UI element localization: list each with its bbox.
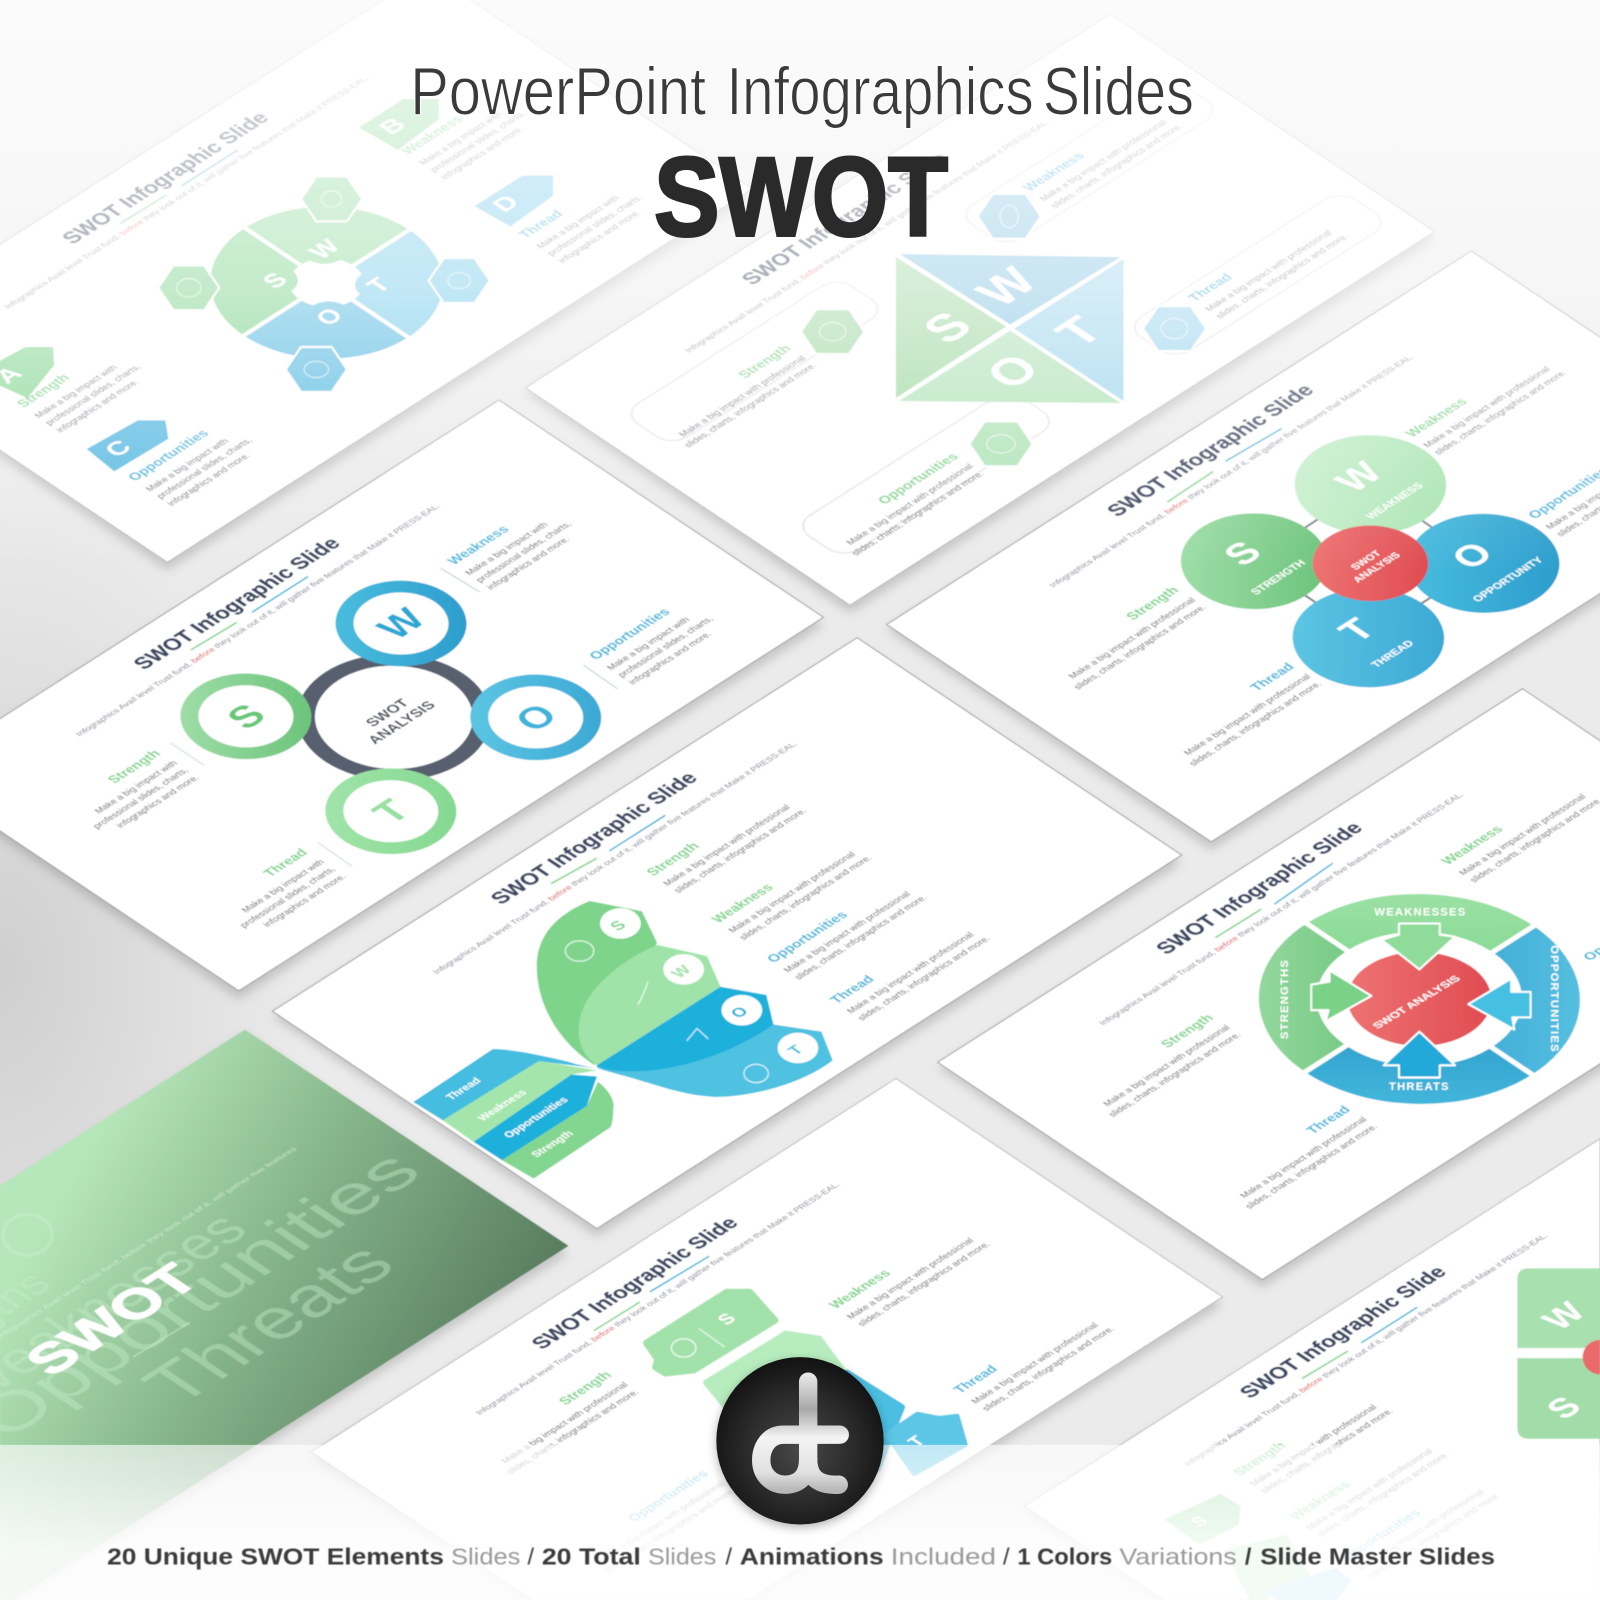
text blocks: slides, charts, infographics and more. xyxy=(855,934,992,1022)
circle diagram: S xyxy=(257,268,294,293)
text blocks: Weakness xyxy=(1020,150,1088,194)
footer feature line: / xyxy=(528,1543,535,1569)
text blocks: Make a big impact with xyxy=(605,616,692,672)
text blocks: Weakness xyxy=(398,113,466,157)
footer feature line: / xyxy=(1003,1543,1010,1569)
text blocks: slides, charts, infographics and more. xyxy=(849,470,986,557)
footer feature line: Slides xyxy=(648,1543,716,1569)
text blocks: Opportunities xyxy=(874,450,962,507)
ribbon diagram: W xyxy=(668,962,696,981)
band W xyxy=(579,945,720,1065)
node W xyxy=(308,563,494,684)
footer feature line: Variations xyxy=(1119,1543,1237,1569)
text blocks: Strength xyxy=(735,342,794,381)
centre label: SWOT ANALYSIS xyxy=(1370,974,1464,1031)
text blocks: infographics and more. xyxy=(165,452,252,508)
text blocks: Make a big impact with professional xyxy=(1457,793,1588,877)
ribbon diagram: S xyxy=(606,918,630,934)
cover sheet xyxy=(0,1030,568,1600)
text blocks: Make a big impact with professional xyxy=(1238,1115,1369,1200)
text blocks: professional slides, charts, xyxy=(238,865,337,929)
footer feature line: Slides xyxy=(451,1543,520,1569)
text blocks: Make a big impact with professional xyxy=(844,462,975,546)
text blocks: infographics and more. xyxy=(438,125,526,181)
centre red circle xyxy=(1289,510,1452,617)
circle diagram: T xyxy=(361,274,397,297)
bubble S: S xyxy=(712,1310,740,1328)
text blocks: slides, charts, infographics and more. xyxy=(737,854,874,941)
heading: SWOT Infographic Slide xyxy=(486,769,703,908)
quadrant panels: S xyxy=(1539,1391,1590,1425)
quadrant panels xyxy=(1517,1268,1600,1439)
band O xyxy=(597,987,773,1071)
main heading line xyxy=(410,54,1194,129)
circle T: THREAD xyxy=(1369,639,1417,670)
heading: Infographics Avail level Trust fund, before they look out of it, will gather five features that Make it PRESS-EAL. xyxy=(683,119,1052,354)
slide sheet xyxy=(887,251,1600,842)
text blocks: Strength xyxy=(1123,584,1182,622)
heading: Infographics Avail level Trust fund, before they look out of it, will gather five features that Make it PRESS-EAL. xyxy=(1097,791,1466,1027)
text pills xyxy=(622,77,1390,559)
text blocks: professional slides, charts, xyxy=(43,363,143,427)
lower band: Opportunities xyxy=(473,1074,597,1160)
heading: Infographics Avail level Trust fund, before they look out of it, will gather five features that Make it PRESS-EAL. xyxy=(1182,1232,1551,1467)
text blocks: Weakness xyxy=(444,523,512,567)
text blocks: slides, charts, infographics and more. xyxy=(1106,1031,1243,1119)
text blocks: slides, charts, infographics and more. xyxy=(1214,232,1350,320)
ribbon diagram: T xyxy=(784,1043,808,1058)
hexagon icons xyxy=(801,194,1206,466)
left background shading xyxy=(0,480,306,1459)
text blocks: slides, charts, infographics and more. xyxy=(980,1325,1117,1413)
quadrant labels: OPPORTUNITIES xyxy=(1548,945,1560,1053)
ribbon diagram: Opportunities xyxy=(501,1095,571,1140)
slide 5: ribbon xyxy=(272,638,1182,1229)
text blocks: Weakness xyxy=(1438,823,1506,867)
text blocks: slides, charts, infographics and more. xyxy=(504,1388,641,1476)
text blocks: Make a big impact with professional xyxy=(596,1480,727,1564)
ribbon diagram: O xyxy=(727,1004,753,1021)
text blocks: Thread xyxy=(827,973,877,1006)
lower band: Thread xyxy=(413,1049,597,1120)
circle S xyxy=(1151,494,1358,629)
text blocks: Thread xyxy=(1185,271,1235,304)
slide sheet xyxy=(311,1079,1222,1600)
slide 1: gear circle xyxy=(0,0,752,562)
circle O xyxy=(1377,493,1591,633)
ribbon diagram xyxy=(413,901,833,1179)
node S: S xyxy=(218,698,276,736)
ribbon diagram: Strength xyxy=(529,1129,576,1160)
text blocks: infographics and more. xyxy=(261,872,348,929)
bubble W xyxy=(706,1334,857,1434)
text blocks: Make a big impact with professional xyxy=(1248,1403,1379,1487)
text blocks: professional slides, charts, xyxy=(428,110,528,174)
centre red circle: ANALYSIS xyxy=(1351,551,1404,585)
circle T: T xyxy=(1330,613,1385,648)
text blocks: Weakness xyxy=(1402,396,1470,439)
text blocks: Make a big impact with professional xyxy=(1101,1024,1232,1108)
text blocks: Make a big impact with professional xyxy=(677,354,808,438)
text blocks: Opportunities xyxy=(586,606,673,662)
text blocks: Strength xyxy=(643,840,702,878)
heading: SWOT Infographic Slide xyxy=(527,1214,744,1353)
text blocks: Make a big impact with professional xyxy=(661,803,792,887)
cover chalk words: Threats xyxy=(125,1231,410,1415)
text blocks: Make a big impact with xyxy=(534,194,622,250)
text blocks: professional slides, charts, xyxy=(154,436,254,500)
band labels: Thread xyxy=(444,1076,484,1102)
text blocks: Thread xyxy=(1247,661,1297,693)
text blocks: Make a big impact with xyxy=(417,110,504,166)
text blocks: Make a big impact with professional xyxy=(845,931,976,1015)
quadrant labels: STRENGTHS xyxy=(1279,959,1291,1039)
text blocks: slides, charts, infographics and more. xyxy=(682,361,819,449)
text blocks xyxy=(1230,1388,1503,1579)
green cover slide xyxy=(0,1030,568,1600)
node S xyxy=(153,656,339,777)
node O: O xyxy=(506,698,567,738)
text blocks: Make a big impact with professional xyxy=(969,1321,1100,1405)
top white fade xyxy=(0,0,1600,571)
slide 8: bottom right xyxy=(1024,1139,1600,1600)
arrows to centre xyxy=(1311,923,1531,1078)
circle W xyxy=(1263,415,1478,555)
quadrant ring xyxy=(1192,851,1600,1147)
text blocks: Make a big impact with professional xyxy=(499,1381,630,1465)
footer feature line: / xyxy=(726,1543,733,1569)
text blocks: Make a big impact with professional xyxy=(1037,118,1169,203)
letter tags xyxy=(0,99,553,471)
circle O: OPPORTUNITY xyxy=(1470,555,1547,604)
cover sub text: Infographics Avail level Trust fund, before they look out of it, will gather five features xyxy=(0,1146,299,1340)
text blocks: professional slides, charts, xyxy=(474,520,573,584)
ring centre: ANALYSIS xyxy=(365,699,440,747)
band T xyxy=(597,1024,833,1097)
node T: T xyxy=(364,793,420,830)
centre red circle: SWOT xyxy=(1349,549,1385,572)
heading: Infographics Avail level Trust fund, before they look out of it, will gather five features that Make it PRESS-EAL. xyxy=(431,740,800,976)
circle S: STRENGTH xyxy=(1249,558,1309,597)
text blocks: slides, charts, infographics and more. xyxy=(1258,1407,1395,1495)
circle W: WEAKNESS xyxy=(1364,481,1426,521)
text blocks: Make a big impact with professional xyxy=(844,1236,976,1321)
main heading line: PowerPoint xyxy=(410,54,706,129)
text blocks: Make a big impact with professional xyxy=(1304,1447,1435,1531)
ring centre xyxy=(269,636,518,799)
text blocks xyxy=(475,1220,1117,1575)
text blocks: Strength xyxy=(1230,1440,1289,1478)
text blocks: Make a big impact with professional xyxy=(1181,673,1313,757)
text blocks: slides, charts, infographics and more. xyxy=(1187,680,1324,768)
letter tags: B xyxy=(374,114,412,139)
text blocks: Weakness xyxy=(708,881,776,925)
text blocks: Opportunities xyxy=(624,1468,712,1524)
main heading line: Infographics xyxy=(727,54,1034,129)
text blocks: Thread xyxy=(1303,1104,1354,1136)
text blocks: Thread xyxy=(516,208,566,240)
circle S: S xyxy=(1215,535,1271,572)
text blocks: Weakness xyxy=(1286,1478,1354,1522)
heading: SWOT Infographic Slide xyxy=(1235,1263,1452,1402)
slide sheet xyxy=(0,0,752,562)
slide 4: overlapping circles xyxy=(887,251,1600,842)
text blocks: Strength xyxy=(1157,1012,1217,1050)
heading: SWOT Infographic Slide xyxy=(129,534,346,673)
slide 2: envelope xyxy=(526,14,1435,605)
text blocks: slides, charts, infographics and more. xyxy=(1243,1123,1380,1210)
footer feature line: Included xyxy=(891,1543,996,1569)
text blocks xyxy=(643,788,992,1022)
envelope diagram: O xyxy=(975,346,1052,397)
text blocks: Make a big impact with professional xyxy=(726,850,858,934)
slide sheet xyxy=(1024,1139,1600,1600)
bubble S xyxy=(646,1292,776,1373)
main title SWOT: SWOT xyxy=(654,134,948,260)
text blocks: Make a big impact with professional xyxy=(1355,1488,1486,1572)
heading: Infographics Avail level Trust fund, before they look out of it, will gather five features that Make it PRESS-EAL. xyxy=(74,502,442,738)
envelope diagram xyxy=(896,254,1123,403)
logo badge xyxy=(716,1357,884,1528)
envelope diagram: T xyxy=(1045,309,1115,355)
heading: SWOT Infographic Slide xyxy=(737,149,954,288)
heading: Infographics Avail level Trust fund, before they look out of it, will gather five features that Make it PRESS-EAL. xyxy=(474,1181,842,1416)
quadrant labels: WEAKNESSES xyxy=(1374,906,1466,918)
text blocks: slides, charts, infographics and more. xyxy=(1071,603,1208,691)
heading: Infographics Avail level Trust fund, before they look out of it, will gather five features that Make it PRESS-EAL. xyxy=(1047,353,1416,589)
letter tags: S xyxy=(1186,1513,1213,1530)
text blocks xyxy=(13,90,656,508)
band S xyxy=(537,901,657,1065)
node O xyxy=(443,657,628,778)
text blocks: Opportunities xyxy=(763,909,851,965)
circle diagram: W xyxy=(303,235,347,263)
text blocks: slides, charts, infographics and more. xyxy=(1048,122,1185,210)
bottom white fade xyxy=(0,1445,1600,1600)
text blocks: slides, charts, infographics and more. xyxy=(601,1487,738,1575)
text blocks xyxy=(653,103,1350,557)
quadrant panels: W xyxy=(1535,1297,1594,1336)
text blocks: slides, charts, infographics and more. xyxy=(792,894,929,981)
text blocks: Strength xyxy=(555,1369,615,1407)
main heading line: Slides xyxy=(1043,54,1194,129)
slide sheet xyxy=(0,400,823,991)
text blocks: Make a big impact with professional xyxy=(781,890,913,974)
text blocks: Opportunities xyxy=(125,427,212,483)
text blocks: infographics and more. xyxy=(54,378,141,434)
text blocks: slides, charts, infographics and more. xyxy=(1432,369,1569,456)
lower band: Weakness xyxy=(443,1061,597,1142)
text blocks: infographics and more. xyxy=(556,209,643,265)
text blocks: infographics and more. xyxy=(114,774,201,830)
text blocks xyxy=(1077,776,1600,1210)
ribbon diagram: Weakness xyxy=(475,1088,530,1123)
bubble T: T xyxy=(903,1432,930,1450)
heading: SWOT Infographic Slide xyxy=(57,109,274,248)
heading: SWOT Infographic Slide xyxy=(1151,819,1368,958)
circle diagram xyxy=(162,175,491,390)
text blocks: Weakness xyxy=(826,1267,894,1311)
letter tags xyxy=(1164,1494,1351,1600)
ribbon icons xyxy=(565,941,768,1083)
bubble O xyxy=(816,1372,902,1469)
heading: Infographics Avail level Trust fund, before they look out of it, will gather five features that Make it PRESS-EAL. xyxy=(2,75,371,310)
text blocks: Opportunities xyxy=(1337,1507,1424,1563)
text blocks: slides, charts, infographics and more. xyxy=(672,807,809,895)
quadrant labels xyxy=(1279,906,1560,1093)
slide 7: speech bubbles xyxy=(311,1079,1222,1600)
footer feature line: 1 Colors xyxy=(1017,1543,1112,1569)
circle W: W xyxy=(1327,456,1392,499)
bubble T xyxy=(887,1414,965,1473)
hexagon icons xyxy=(158,177,490,392)
slide sheet xyxy=(938,689,1600,1280)
node W: W xyxy=(369,602,435,646)
footer feature line: 20 Unique SWOT Elements xyxy=(107,1543,444,1569)
circle diagram: O xyxy=(310,304,349,330)
letter tags: D xyxy=(487,191,525,216)
envelope diagram: W xyxy=(965,259,1050,314)
text blocks: Make a big impact with professional xyxy=(1066,596,1198,680)
lower band: Strength xyxy=(502,1082,614,1179)
slide 6: circle with arrows xyxy=(938,689,1600,1280)
cover title: SWOT xyxy=(12,1255,211,1384)
text blocks: Make a big impact with professional xyxy=(1421,365,1552,449)
text blocks: Thread xyxy=(950,1363,1001,1396)
text blocks xyxy=(1042,349,1600,768)
text blocks: professional slides, charts, xyxy=(545,193,645,257)
ring centre: SWOT xyxy=(363,697,413,730)
text blocks: slides, charts, infographics and more. xyxy=(1315,1451,1451,1538)
footer feature line xyxy=(107,1543,1495,1569)
text blocks: professional slides, charts, xyxy=(91,766,190,830)
text blocks: Make a big impact with professional xyxy=(1203,229,1334,313)
tag circles xyxy=(600,908,818,1063)
footer feature line: / xyxy=(1245,1543,1252,1569)
circle T xyxy=(1261,568,1476,708)
text blocks: Make a big impact with xyxy=(92,759,180,815)
footer feature line: Animations xyxy=(740,1543,884,1569)
text blocks: Make a big impact with xyxy=(143,437,231,493)
footer feature line: Slide Master Slides xyxy=(1260,1543,1495,1569)
envelope diagram: S xyxy=(912,304,984,352)
text blocks: Make a big impact with xyxy=(239,858,327,914)
text blocks: Make a big impact with xyxy=(463,521,550,577)
text blocks: slides, charts, infographics and more. xyxy=(855,1240,992,1328)
slide sheet xyxy=(526,14,1435,605)
text blocks: infographics and more. xyxy=(626,630,714,686)
text blocks: slides, charts, infographics and more. xyxy=(1366,1492,1503,1579)
text blocks: Make a big impact with xyxy=(32,364,119,420)
slide 3: ring with four nodes xyxy=(0,400,823,991)
text blocks: Strength xyxy=(104,747,164,786)
node T xyxy=(298,751,483,872)
text blocks: professional slides, charts, xyxy=(615,615,715,679)
text blocks xyxy=(61,500,726,937)
text blocks: Strength xyxy=(13,372,73,410)
quadrant labels: THREATS xyxy=(1389,1081,1450,1093)
circle O: O xyxy=(1443,536,1503,576)
slide sheet xyxy=(272,638,1182,1229)
letter tags: C xyxy=(99,436,137,461)
text blocks: infographics and more. xyxy=(484,535,572,591)
heading: SWOT Infographic Slide xyxy=(1102,381,1319,520)
connecting square xyxy=(1254,485,1484,638)
footer feature line: 20 Total xyxy=(542,1543,641,1569)
icon: ct monogram xyxy=(761,1382,840,1485)
text blocks: Thread xyxy=(260,846,311,879)
